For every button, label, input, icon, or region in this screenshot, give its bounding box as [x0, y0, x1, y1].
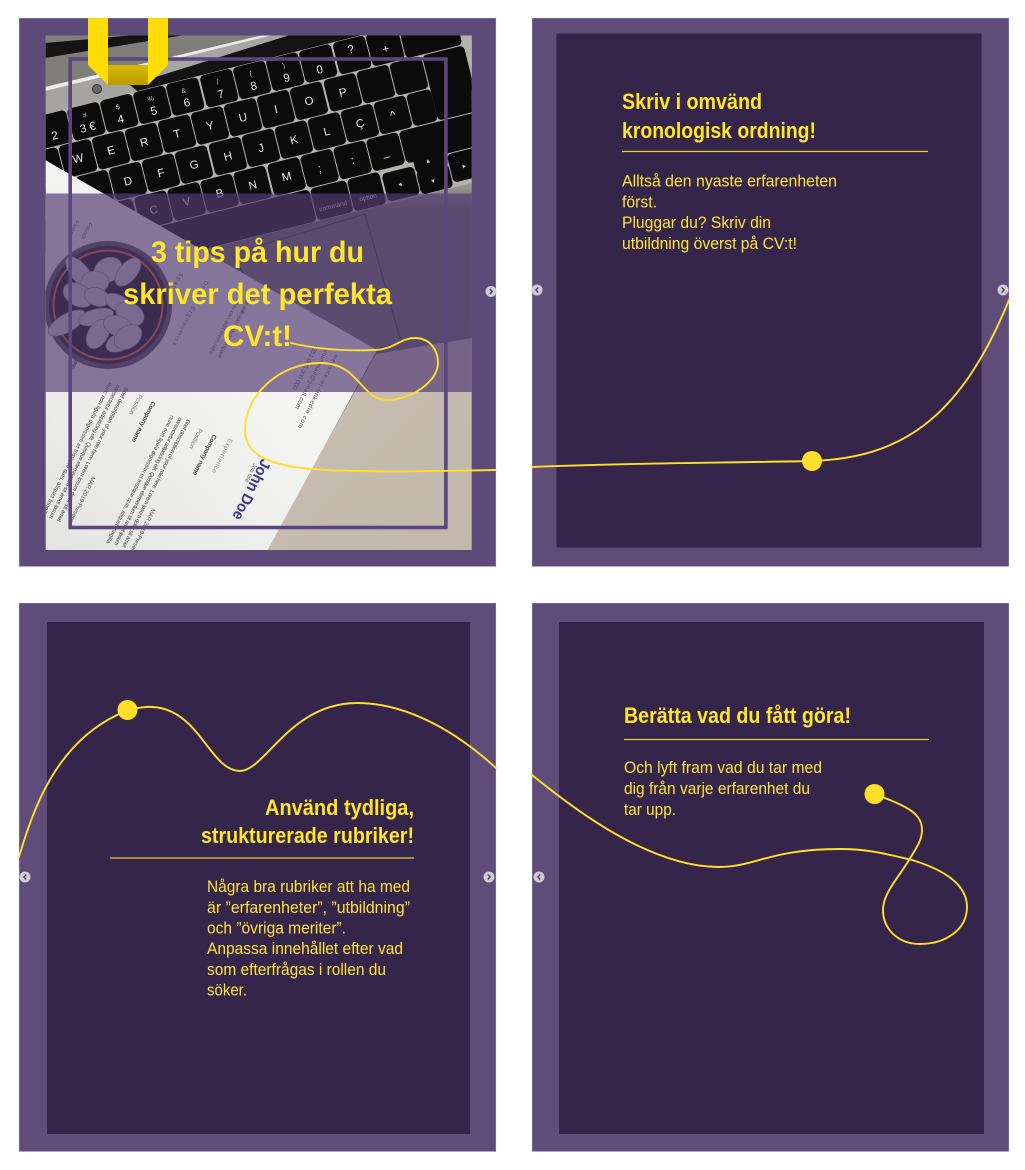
CV text: Position: [127, 393, 143, 416]
keyboard keys: 5: [149, 105, 159, 118]
cover photo: laptop, CV and plant: [46, 36, 472, 550]
text: tip 3 body: Och lyft fram vad du tar med: [624, 759, 822, 777]
keyboard keys: U: [238, 111, 249, 125]
keyboard keys: 9: [282, 72, 291, 85]
CV text: Position: [187, 427, 203, 450]
CV text: consectetur adipiscing elit. Quisque elementum sit amet ipsum: [112, 416, 183, 546]
text: tip 1 body: Alltså den nyaste erfarenheten: [622, 172, 837, 190]
heading: tip 2: Använd tydliga,: [265, 795, 414, 820]
text: tip 2 body: som efterfrågas i rollen du: [207, 961, 386, 979]
CV text: +351 000 000 000: [290, 343, 319, 391]
text: tip 2 body: Anpassa innehållet efter vad: [207, 940, 403, 958]
CV text: Company name: [130, 400, 156, 444]
cover title: 3 tips på hur du: [151, 236, 364, 269]
CV text: your.mail@gmail.com: [293, 348, 329, 410]
cover title: [123, 236, 392, 353]
curve: tip 3: [532, 775, 967, 944]
keyboard keys: (: [249, 71, 254, 78]
icon: dot: [864, 784, 884, 804]
keyboard keys: ;: [317, 163, 323, 175]
keyboard keys: #: [82, 112, 88, 120]
text: tip 3 body: dig från varje erfarenhet du: [624, 780, 810, 798]
icon: next arrow: [486, 286, 496, 297]
CV text: Company name: [191, 433, 217, 477]
keyboard keys: O: [303, 95, 315, 109]
icon: yellow ribbon: [88, 18, 168, 85]
text: tip 3 body: tar upp.: [624, 801, 676, 819]
CV text: nunc non ligula dignissim et tristique quis, aliquet fringilla: [39, 381, 113, 518]
keyboard keys: $: [115, 104, 121, 112]
keyboard keys: ◂: [397, 181, 403, 189]
CV text: Fluent: [66, 219, 80, 237]
keyboard keys: V: [182, 196, 192, 209]
CV text: MAR 2019-Present: [127, 507, 156, 555]
CV text: Company name: [69, 331, 93, 370]
keyboard keys: option: [359, 192, 378, 203]
keyboard keys: %: [147, 95, 155, 104]
keyboard keys: E: [106, 144, 117, 158]
icon: previous arrow: [534, 872, 544, 882]
CV paper: [45, 160, 377, 551]
keyboard keys: L: [323, 126, 332, 139]
CV text: Design Ergonomics: [171, 279, 209, 346]
keyboard keys: C: [148, 204, 159, 217]
CV text: Experience: [210, 437, 233, 475]
keyboard keys: ?: [346, 44, 356, 57]
heading: tip 1: kronologisk ordning!: [622, 118, 816, 143]
heading: tip 2: [201, 795, 414, 848]
text: tip 2 body: Några bra rubriker att ha med: [207, 878, 410, 896]
keyboard keys: D: [123, 175, 134, 189]
keyboard keys: M: [281, 170, 293, 184]
keyboard keys: ): [282, 63, 286, 70]
CV text: French: [79, 221, 93, 240]
plant pot: [44, 241, 172, 369]
keyboard keys: :: [350, 155, 356, 167]
CV text: Spanish: [165, 271, 184, 301]
keyboard keys: W: [72, 152, 85, 167]
text: tip 1 body: först.: [622, 194, 657, 212]
panel: tip 3: [532, 603, 1009, 1151]
keyboard keys: ▸: [462, 163, 468, 170]
keyboard keys: I: [273, 104, 279, 116]
CV text: nunc non ligula dignissim et tristique quis, aliquet fringilla: [104, 414, 175, 545]
heading: tip 3: Berätta vad du fått göra!: [624, 703, 851, 728]
keyboard keys: P: [338, 87, 349, 100]
icon: next arrow: [484, 872, 494, 882]
keyboard keys: &: [181, 87, 187, 95]
CV text: website-or-linkedin.com: [296, 352, 340, 429]
heading: tip 2: strukturerade rubriker!: [201, 823, 414, 848]
keyboard keys: _: [380, 146, 391, 160]
text: tip 3 body: [624, 759, 822, 819]
heading: tip 1: Skriv i omvänd: [622, 89, 762, 114]
keyboard keys: G: [188, 159, 200, 172]
keyboard keys: 6: [182, 97, 192, 110]
keyboard keys: 8: [249, 80, 258, 93]
text: tip 2 body: är ”erfarenheter”, ”utbildning”: [207, 899, 410, 917]
purple title band: [45, 194, 473, 392]
keyboard keys: ^: [389, 109, 398, 122]
keyboard keys: [46, 36, 472, 289]
keyboard keys: +: [381, 43, 391, 56]
panel: cover: [0, 9, 508, 566]
cover title: skriver det perfekta: [123, 278, 392, 311]
keyboard keys: N: [247, 179, 258, 193]
text: tip 2 body: [207, 878, 410, 1000]
keyboard keys: 4: [116, 113, 126, 126]
text: tip 1 body: utbildning överst på CV:t!: [622, 235, 797, 253]
keyboard keys: R: [139, 136, 150, 150]
keyboard keys: ▴: [426, 157, 431, 165]
CV text: [30, 219, 340, 555]
icon: dot: [118, 700, 138, 720]
curve: cover loop: [245, 338, 496, 471]
keyboard keys: 0: [315, 64, 324, 77]
text: tip 2 body: och ”övriga meriter”.: [207, 920, 346, 938]
CV text: consectetur adipiscing elit. Quisque elementum sit amet ipsum: [47, 383, 121, 520]
icon: next arrow: [998, 284, 1008, 296]
keyboard keys: 2: [50, 130, 60, 143]
keyboard keys: Ç: [355, 117, 366, 131]
CV text: Brief description: [30, 289, 54, 327]
CV text: MAR 2019-Present: [67, 475, 96, 523]
keyboard keys: 3 €: [79, 120, 98, 136]
panel: tip 2: [19, 603, 496, 1151]
keyboard keys: B: [215, 187, 225, 201]
CV text: Brief description of your role here. Lorem ipsum dolor sit amet: [120, 418, 191, 549]
trackpad: [232, 214, 401, 349]
panel: tip 1: [532, 18, 1009, 566]
keyboard keys: Y: [205, 120, 216, 133]
table: [265, 338, 472, 552]
keyboard keys: command: [319, 200, 348, 213]
keyboard keys: K: [289, 134, 300, 147]
CV text: Brief description of your role here. Lorem ipsum dolor sit amet: [55, 386, 129, 523]
CV text: Job title: [243, 462, 258, 484]
text: tip 2 body: söker.: [207, 982, 247, 1000]
cover title: CV:t!: [223, 320, 292, 353]
icon: dot: [802, 451, 822, 471]
text: tip 1 body: Pluggar du? Skriv din: [622, 214, 771, 232]
keyboard keys: H: [223, 150, 234, 164]
heading: tip 1: [622, 89, 816, 143]
CV text: John Doe: [228, 456, 274, 523]
keyboard keys: J: [257, 142, 265, 155]
curve: tip 2: [19, 703, 496, 857]
keyboard keys: T: [172, 128, 182, 141]
inner frame: [70, 59, 446, 528]
CV text: You can add them here: [207, 299, 240, 356]
keyboard keys: /: [216, 79, 220, 86]
text: tip 1 body: [622, 172, 837, 253]
CV text: Other skills you have more space: [215, 292, 254, 360]
keyboard keys: F: [156, 167, 166, 180]
keyboard keys: ▾: [431, 178, 436, 185]
keyboard keys: 7: [216, 88, 226, 102]
icon: previous arrow: [532, 284, 542, 296]
curve: tip 1: [532, 300, 1009, 467]
icon: previous arrow: [20, 872, 30, 882]
